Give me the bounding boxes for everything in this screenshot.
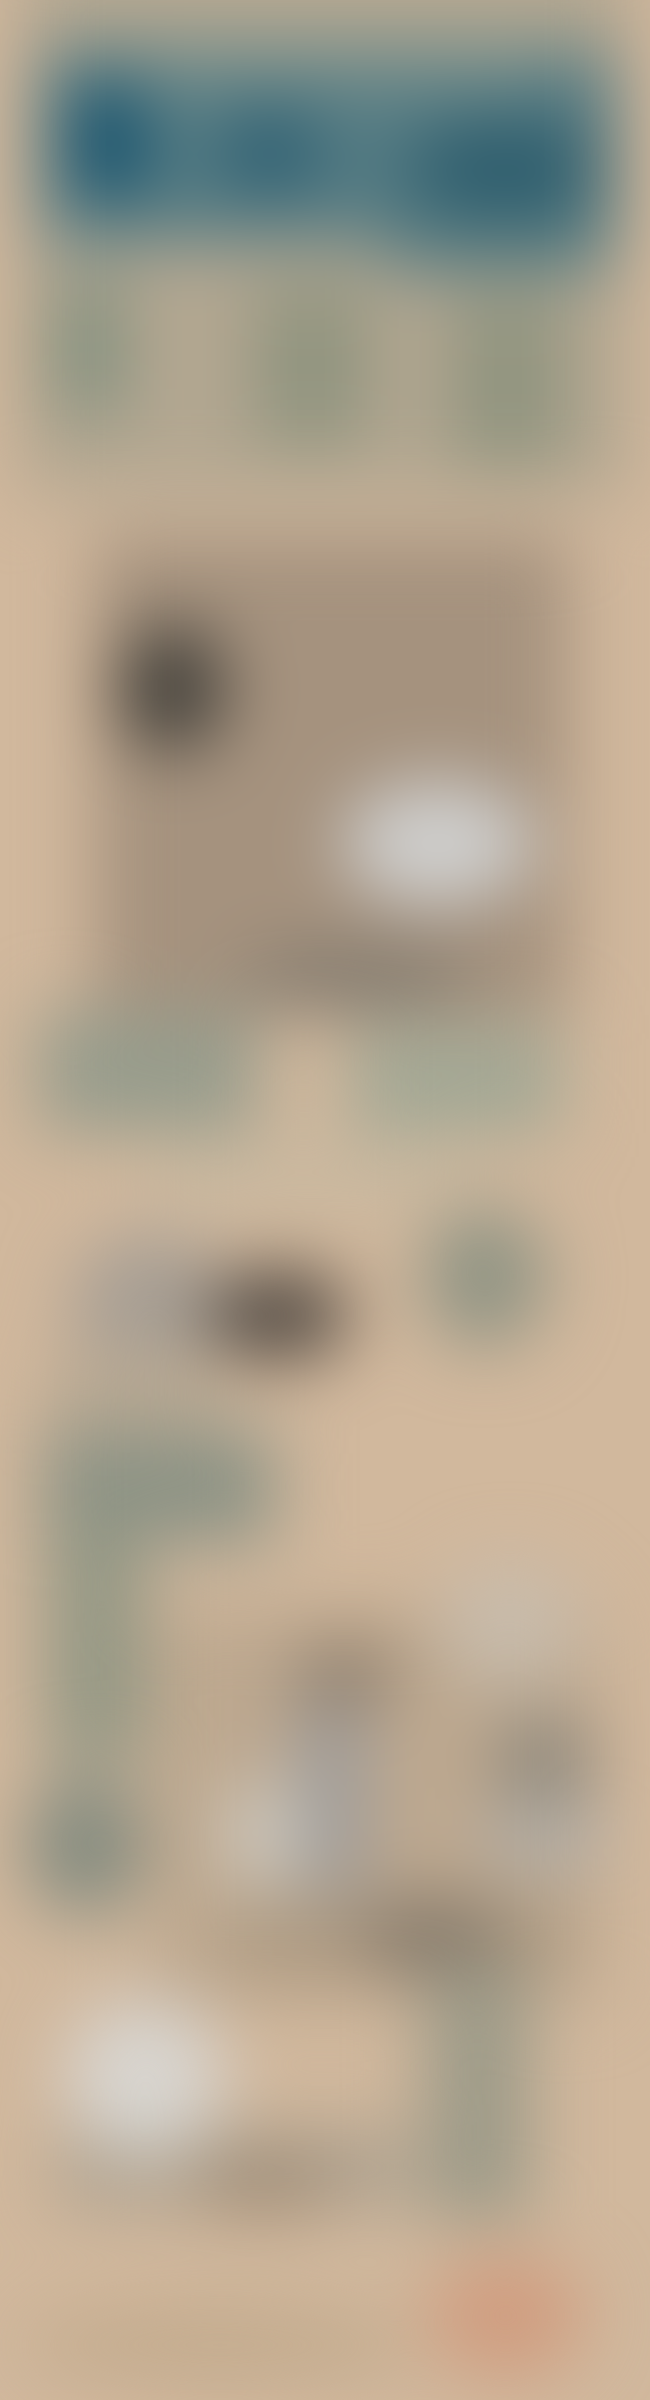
stack upper block xyxy=(42,1430,274,1545)
panel: upper section backdrop xyxy=(20,0,630,495)
panel: lower diagram xyxy=(224,1563,611,1980)
light oval left xyxy=(224,1777,300,1893)
dark circle xyxy=(118,624,226,752)
panel: lower diagram backdrop xyxy=(150,1610,600,2000)
wide band xyxy=(55,2130,410,2208)
panel: paired text blocks xyxy=(38,1010,560,1210)
column centre xyxy=(255,285,367,445)
panel: central diagram backdrop xyxy=(95,535,570,1015)
right column xyxy=(425,1965,530,2220)
text block right xyxy=(350,1025,560,1133)
column right xyxy=(452,295,564,465)
grey column top xyxy=(293,1641,397,1709)
band darker centre xyxy=(193,2155,337,2215)
green-grey circle xyxy=(423,1207,547,1347)
dark node xyxy=(358,1897,506,1973)
white circle xyxy=(342,781,534,905)
banner lower right extension xyxy=(385,195,610,270)
banner accent centre xyxy=(220,104,320,196)
text block left xyxy=(38,1010,258,1132)
banner accent right xyxy=(407,116,603,220)
panel: bottom section xyxy=(20,1965,584,2385)
bottom band xyxy=(230,1900,560,1980)
banner body xyxy=(42,50,614,240)
column left xyxy=(52,280,124,415)
right dark oval xyxy=(493,1714,597,1806)
panel: middle diagram xyxy=(50,1207,547,1440)
stack column xyxy=(45,1530,145,1760)
dark oval xyxy=(206,1269,350,1361)
light oval upper right xyxy=(440,1563,580,1687)
banner accent left xyxy=(70,84,146,200)
salmon badge xyxy=(428,2254,584,2378)
grey column xyxy=(298,1650,366,1890)
left haze xyxy=(72,1233,228,1377)
panel: header banner xyxy=(42,45,614,270)
footer tint xyxy=(20,2305,420,2385)
lighter gap xyxy=(150,1140,460,1210)
central diagram xyxy=(118,624,534,1004)
banner upper fade xyxy=(140,45,550,97)
right lower oval xyxy=(479,1808,611,1868)
left lower blob xyxy=(25,1773,145,1917)
white circle xyxy=(65,1999,225,2155)
dark strip xyxy=(240,952,480,1004)
haze link xyxy=(50,1350,220,1440)
panel: three intro columns xyxy=(52,280,564,465)
panel: left text stack xyxy=(25,1430,274,1917)
